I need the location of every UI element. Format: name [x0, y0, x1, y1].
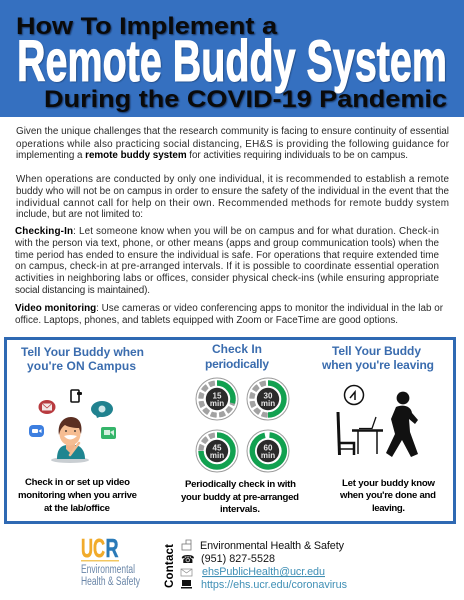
operations paragraph: individual cannot call for help on their own. Recommended methods for remote buddy system — [16, 198, 449, 209]
intro paragraph — [16, 126, 450, 161]
title line 3: During the COVID-19 Pandemic — [44, 86, 447, 113]
title line 3: During the COVID-19 Pandemic — [45, 87, 448, 114]
heading: on campus: Tell Your Buddy when — [21, 345, 144, 359]
caption: leaving: Let your buddy know — [342, 478, 436, 489]
logo: UCR Environmental Health & Safety: UC — [81, 533, 105, 563]
caption: leaving: leaving. — [372, 503, 405, 514]
timer: 45 min — [196, 430, 238, 472]
timer: 30 min — [247, 378, 289, 420]
panel: leaving — [321, 344, 436, 514]
heading: check in — [205, 342, 269, 371]
caption: check in: intervals. — [220, 504, 260, 515]
video monitoring paragraph: office. Laptops, phones, and tablets equipped with Zoom or FaceTime are good options. — [15, 315, 398, 326]
logo: UCR Environmental Health & Safety: Environmental — [81, 564, 135, 576]
contact details: Environmental Health & Safety — [200, 540, 345, 552]
intro paragraph: Given the unique challenges that the research community is facing to ensure continuity of essential — [16, 126, 449, 137]
checking-in paragraph: on campus, check-in at pre-arranged intervals. If it is possible to coordinate essential operation — [15, 261, 439, 272]
intro paragraph: implementing a remote buddy system for activities requiring individuals to be on campus. — [16, 150, 408, 161]
heading: leaving: Tell Your Buddy — [332, 344, 421, 358]
timer: 45 min: 45 — [213, 444, 222, 452]
logo: UCR Environmental Health & Safety — [81, 533, 140, 588]
caption: check in: Periodically check in with — [185, 479, 296, 490]
timer: 30 min: 30 — [264, 392, 273, 400]
timer: 15 min: min — [210, 399, 224, 408]
icon: mailbox — [182, 540, 191, 550]
title line 1: How To Implement a — [17, 14, 278, 41]
checking-in paragraph: social distancing is maintained). — [15, 285, 150, 296]
heading: on campus: you're ON Campus — [27, 359, 136, 373]
contact details — [200, 540, 348, 591]
timer: 60 min: min — [261, 451, 275, 460]
contact label: Contact — [164, 544, 176, 588]
checking-in paragraph: time period has ended to ensure the individual is safe. For operations that require extended time — [15, 250, 440, 261]
heading: check in: Check In — [212, 342, 262, 356]
contact icons — [181, 540, 195, 588]
checking-in paragraph: activities in neighboring labs or offices, consider physical check-ins (while ensuring appropriate — [15, 273, 440, 284]
heading: leaving — [321, 344, 434, 372]
panel: buddy system steps — [6, 338, 454, 522]
illustration: chair and desk — [338, 412, 383, 455]
video monitoring paragraph: Video monitoring: Use cameras or video conferencing apps to monitor the individual in the lab or — [15, 303, 444, 314]
video monitoring paragraph — [15, 303, 444, 326]
icon: phone — [71, 390, 82, 402]
illustration: walking figure — [386, 392, 418, 457]
operations paragraph: include, but are not limited to: — [16, 209, 143, 220]
icon: clock — [344, 386, 364, 404]
logo: UCR Environmental Health & Safety: R — [106, 533, 119, 563]
caption: check in — [181, 479, 299, 515]
heading: on campus — [21, 345, 144, 373]
header banner — [0, 0, 464, 117]
heading: check in: periodically — [205, 357, 269, 371]
heading: leaving: when you're leaving — [321, 358, 434, 372]
caption: on campus: Check in or set up video — [25, 477, 130, 488]
timer: 15 min: 15 — [213, 392, 222, 400]
caption: leaving: when you're done and — [339, 490, 436, 501]
timer: 30 min: min — [261, 399, 275, 408]
intro paragraph: operations while also practicing social distancing, EH&S is providing the following guidance for — [16, 139, 450, 150]
caption: on campus: monitoring when you arrive — [18, 490, 137, 501]
icon: facetime — [101, 427, 116, 439]
caption: leaving — [339, 478, 436, 514]
icon: telephone: ☎ — [181, 553, 195, 566]
icon: email bubble — [38, 400, 56, 414]
icon: zoom camera — [29, 425, 44, 437]
panel: on campus — [18, 345, 144, 514]
icon: phone call bubble — [91, 401, 113, 418]
checking-in paragraph — [14, 226, 440, 296]
checking-in paragraph: Checking-In: Let someone know when you will be on campus and for what duration. Check-in — [15, 226, 439, 237]
timer: 15 min — [196, 378, 238, 420]
timer: 60 min — [247, 430, 289, 472]
logo: UCR Environmental Health & Safety: Health & Safety — [81, 576, 140, 588]
caption: check in: your buddy at pre-arranged — [181, 492, 299, 503]
operations paragraph — [16, 174, 450, 220]
timer: 45 min: min — [210, 451, 224, 460]
contact details: (951) 827-5528 — [201, 553, 275, 565]
timer: 60 min: 60 — [264, 444, 273, 452]
caption: on campus — [18, 477, 137, 514]
caption: on campus: at the lab/office — [44, 503, 110, 514]
contact details: https://ehs.ucr.edu/coronavirus — [201, 579, 348, 591]
contact details: ehsPublicHealth@ucr.edu — [202, 566, 325, 578]
icon: envelope — [181, 569, 192, 576]
illustration: person thinking — [51, 417, 89, 463]
icon: computer — [181, 580, 192, 588]
operations paragraph: When operations are conducted by only one individual, it is recommended to establish a remote — [16, 174, 450, 185]
panel: check in periodically — [181, 342, 299, 515]
title line 1: How To Implement a — [16, 13, 277, 40]
operations paragraph: buddy who will not be on campus in order to ensure the safety of the individual in the event that the — [16, 186, 450, 197]
checking-in paragraph: with the person via text, phone, or other means (apps and group communication tools) when the — [14, 238, 440, 249]
